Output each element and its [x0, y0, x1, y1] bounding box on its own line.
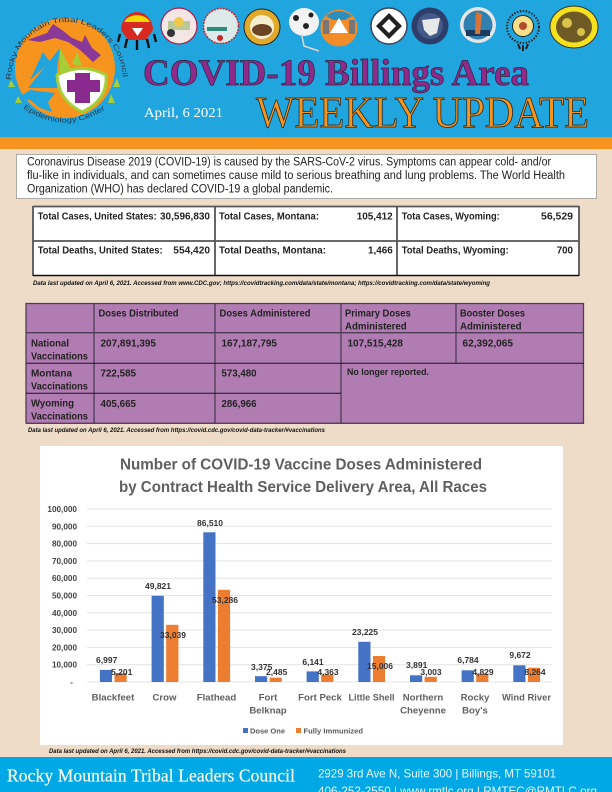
- y axis labels: 70,000: [52, 557, 77, 566]
- data labels: 6,784: [457, 655, 479, 665]
- date: April, 6 2021: [144, 105, 223, 120]
- case and death totals table: Total Deaths, United States:: [38, 246, 163, 256]
- y axis labels: 10,000: [52, 661, 77, 670]
- intro text box: Coronavirus Disease 2019 (COVID-19) is caused by the SARS-CoV-2 virus. Symptoms can appear cold- and/or: [27, 156, 551, 168]
- category labels: Flathead: [197, 692, 236, 704]
- legend: [243, 726, 363, 736]
- category labels: Fort: [259, 692, 278, 704]
- vaccination table: Vaccinations: [31, 352, 88, 362]
- category labels: Little Shell: [348, 692, 394, 704]
- vaccination table: National: [31, 338, 69, 350]
- vaccination table: Vaccinations: [31, 412, 88, 422]
- vaccination table: No longer reported.: [347, 367, 429, 378]
- footnote: case data source: Data last updated on April 6, 2021. Accessed from www.CDC.gov; https://covidtracking.com/data/state/montana; https://covidtracking.com/data/state/wyoming: [33, 280, 490, 287]
- vaccination table: Wyoming: [31, 398, 74, 410]
- y axis labels: -: [70, 678, 73, 687]
- category labels: Fort Peck: [298, 692, 343, 704]
- data labels: 8,264: [524, 667, 546, 677]
- data labels: 4,363: [317, 667, 339, 677]
- tribal seal row: [118, 6, 598, 51]
- category labels: Crow: [153, 692, 177, 704]
- seal 6: [320, 10, 358, 46]
- vaccination table: Montana: [31, 368, 72, 380]
- chart panel: doses administered by delivery area: [40, 446, 563, 745]
- data labels: 3,003: [420, 667, 442, 677]
- legend: Dose One: [250, 726, 285, 736]
- case and death totals table: Total Cases, Montana:: [219, 212, 319, 222]
- category labels: Wind River: [502, 692, 551, 704]
- legend: Fully Immunized: [304, 726, 363, 736]
- data labels: [96, 518, 546, 677]
- vaccination table: 405,665: [100, 399, 136, 410]
- category labels: Northern: [403, 692, 443, 704]
- y axis labels: 50,000: [52, 592, 77, 600]
- bars: fully immunized: [114, 590, 540, 682]
- seal 4: bison: [244, 9, 280, 45]
- footnote: vaccination data source: Data last updated on April 6, 2021. Accessed from https://covid.cdc.gov/covid-data-tracker/#vaccinations: [28, 427, 325, 434]
- data labels: 6,141: [302, 657, 324, 667]
- footnote: chart data source: Data last updated on April 6, 2021. Accessed from https://covid.cdc.gov/covid-data-tracker/#vaccinations: [49, 748, 346, 755]
- vaccination table: Vaccinations: [31, 382, 88, 392]
- chart title: [119, 456, 487, 496]
- y axis labels: 90,000: [52, 522, 77, 531]
- seal 7: diamonds: [371, 8, 407, 44]
- vaccination table: 62,392,065: [462, 338, 513, 350]
- case and death totals table: 30,596,830: [160, 212, 210, 222]
- data labels: 2,485: [266, 667, 288, 677]
- data labels: 23,225: [352, 627, 378, 637]
- bars: dose one: [100, 532, 526, 682]
- vaccination table: Doses Administered: [220, 308, 310, 320]
- data labels: 5,201: [111, 667, 133, 677]
- intro text box: Organization (WHO) has declared COVID-19 a global pandemic.: [27, 184, 333, 196]
- seal 9: [460, 7, 496, 43]
- chart title: Number of COVID-19 Vaccine Doses Administered: [120, 456, 482, 474]
- vaccination table: 573,480: [222, 368, 257, 380]
- case and death totals table: Total Deaths, Wyoming:: [402, 246, 509, 256]
- data labels: 4,829: [472, 667, 494, 677]
- title: COVID-19 Billings Area: COVID-19 Billings Area: [143, 53, 529, 94]
- intro text box: flu-like in individuals, and can sometimes cause mild to serious breathing and lung problems. The World Health: [27, 170, 565, 182]
- y axis labels: 30,000: [52, 626, 77, 635]
- data labels: 33,039: [160, 630, 186, 640]
- case and death totals table: 105,412: [357, 212, 393, 222]
- data labels: 9,672: [509, 650, 531, 660]
- data labels: 53,286: [212, 595, 238, 605]
- vaccination table: [26, 303, 584, 424]
- vaccination table: 207,891,395: [100, 338, 156, 350]
- case and death totals table: Tota Cases, Wyoming:: [402, 212, 500, 222]
- data labels: 3,375: [251, 662, 273, 672]
- category labels: [92, 692, 551, 716]
- case and death totals table: Total Deaths, Montana:: [219, 246, 326, 256]
- seal 10: Fort Peck: [507, 11, 539, 51]
- logo: Rocky Mountain Tribal Leaders Council Epidemiology Center: [6, 16, 128, 124]
- data labels: 86,510: [197, 518, 223, 528]
- seal 8: navy: [412, 8, 448, 44]
- footer address: 2929 3rd Ave N, Suite 300 | Billings, MT 59101: [318, 766, 556, 780]
- seal 2: [161, 8, 197, 44]
- category labels: Rocky: [461, 692, 490, 704]
- logo: Rocky Mountain Tribal Leaders Council Epidemiology Center: Rocky Mountain Tribal Leaders Council: [6, 16, 128, 80]
- vaccination table: 286,966: [222, 399, 257, 410]
- case and death totals table: 1,466: [368, 246, 393, 256]
- footer band: [0, 757, 612, 792]
- vaccination table: 722,585: [100, 368, 136, 380]
- case and death totals table: Total Cases, United States:: [38, 212, 157, 222]
- data labels: 6,997: [96, 655, 118, 665]
- header banner: [0, 0, 612, 149]
- case and death totals table: 700: [557, 246, 573, 256]
- category labels: Blackfeet: [92, 692, 135, 704]
- y axis labels: 60,000: [52, 574, 77, 583]
- y axis labels: 40,000: [52, 609, 77, 618]
- vaccination table: Administered: [460, 322, 522, 332]
- category labels: Cheyenne: [400, 706, 446, 716]
- seal 5: feathered head: [289, 8, 319, 51]
- logo: Rocky Mountain Tribal Leaders Council Epidemiology Center: Epidemiology Center: [24, 104, 104, 124]
- case and death totals table: [33, 206, 579, 276]
- vaccination table: 167,187,795: [222, 338, 277, 350]
- seal 3: [204, 8, 238, 44]
- chart title: by Contract Health Service Delivery Area, All Races: [119, 479, 487, 496]
- vaccination table: Primary Doses: [345, 308, 411, 320]
- seal 1: medicine wheel: [118, 12, 156, 50]
- intro text box: [16, 154, 596, 198]
- vaccination table: 107,515,428: [348, 338, 403, 350]
- footer organisation name: Rocky Mountain Tribal Leaders Council: [7, 766, 295, 786]
- category labels: Belknap: [249, 706, 287, 716]
- y axis labels: 80,000: [52, 540, 77, 549]
- case and death totals table: 554,420: [173, 246, 210, 256]
- vaccination table: Booster Doses: [460, 308, 525, 320]
- seal 11: gold: [550, 6, 598, 48]
- data labels: 15,006: [367, 661, 393, 671]
- data labels: 49,821: [145, 581, 171, 591]
- category labels: Boy's: [462, 706, 488, 716]
- title: Weekly Update: WEEKLY UPDATE: [256, 88, 589, 137]
- case and death totals table: 56,529: [541, 212, 573, 222]
- y axis labels: 100,000: [47, 505, 77, 514]
- vaccination table: Administered: [345, 322, 407, 332]
- data labels: 3,891: [406, 660, 428, 670]
- y axis labels: [47, 505, 77, 687]
- y axis labels: 20,000: [52, 643, 77, 652]
- vaccination table: Doses Distributed: [98, 308, 178, 320]
